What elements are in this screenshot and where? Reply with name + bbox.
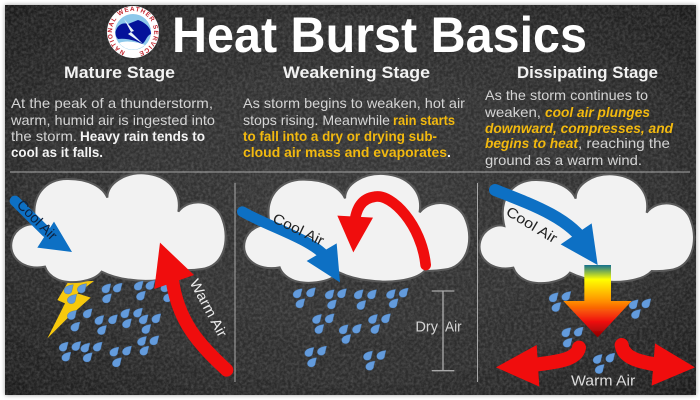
- text block: weakening stage: As storm begins to weaken, hot air: [243, 95, 465, 111]
- text block: mature stage: cool as it falls.: [11, 144, 103, 160]
- heading: dissipating stage: Dissipating Stage: [517, 63, 658, 82]
- text block: mature stage: warm, humid air is ingested into: [10, 112, 215, 128]
- arrow: warm wind left: [496, 345, 579, 387]
- arrow: cool air: Cool Air: [503, 204, 560, 247]
- cloud: [11, 173, 226, 282]
- label: warm air: Warm Air: [571, 374, 636, 390]
- text block: dissipating stage: cool air plunges: [545, 104, 650, 120]
- arrow: cool air: [242, 211, 340, 282]
- text block: weakening stage: cloud air mass and evaporates: [243, 144, 447, 160]
- rain drops: [549, 291, 651, 374]
- text block: dissipating stage: ground as a warm wind.: [485, 152, 642, 168]
- dry air bracket: Air: [445, 320, 462, 336]
- arrow: warm air: Warm Air: [186, 277, 230, 340]
- text block: dissipating stage: downward, compresses, and: [485, 120, 673, 136]
- diagram: dissipating stage: [480, 174, 695, 390]
- arrow: cool air: [13, 197, 72, 252]
- text block: mature stage: the storm.: [11, 128, 77, 144]
- title: Heat Burst Basics: [172, 7, 587, 63]
- text block: dissipating stage: , reaching the: [578, 135, 670, 151]
- text block: weakening stage: [243, 95, 465, 160]
- arrow: rising air curling back: [337, 196, 426, 265]
- arrow: warm air: [154, 243, 230, 370]
- arrow: cool air: Cool Air: [270, 211, 327, 249]
- rain drops: [59, 280, 173, 367]
- heading: mature stage: Mature Stage: [64, 63, 175, 82]
- text block: mature stage: [10, 95, 215, 160]
- text block: mature stage: Heavy rain tends to: [80, 128, 205, 144]
- text block: mature stage: At the peak of a thunderstorm,: [11, 95, 213, 111]
- text block: weakening stage: to fall into a dry or drying sub-: [243, 128, 437, 144]
- text block: weakening stage: .: [447, 144, 451, 160]
- dry air bracket: [415, 291, 462, 371]
- arrow: cool air: Cool Air: [13, 197, 60, 244]
- text block: dissipating stage: As the storm continues to: [485, 87, 648, 103]
- text block: weakening stage: stops rising. Meanwhile: [243, 112, 390, 128]
- rain drops: [293, 288, 408, 370]
- diagram: weakening stage: [242, 174, 469, 371]
- text block: dissipating stage: begins to heat: [485, 135, 579, 151]
- arrow: cool air: [495, 190, 598, 265]
- lightning bolt: [47, 281, 94, 338]
- text block: dissipating stage: [484, 87, 673, 168]
- arrow: warm wind right: [622, 343, 695, 386]
- cloud: [244, 174, 469, 283]
- heading: weakening stage: Weakening Stage: [283, 63, 430, 82]
- arrow: compressing, heating air: [563, 265, 632, 337]
- cloud: [480, 174, 694, 283]
- diagram: mature stage: [11, 173, 230, 370]
- logo: National Weather Service: NATIONAL WEATHER SERVICE: [108, 6, 158, 56]
- text block: dissipating stage: weaken,: [484, 104, 541, 120]
- text block: weakening stage: rain starts: [393, 112, 455, 128]
- dry air bracket: Dry: [415, 320, 439, 336]
